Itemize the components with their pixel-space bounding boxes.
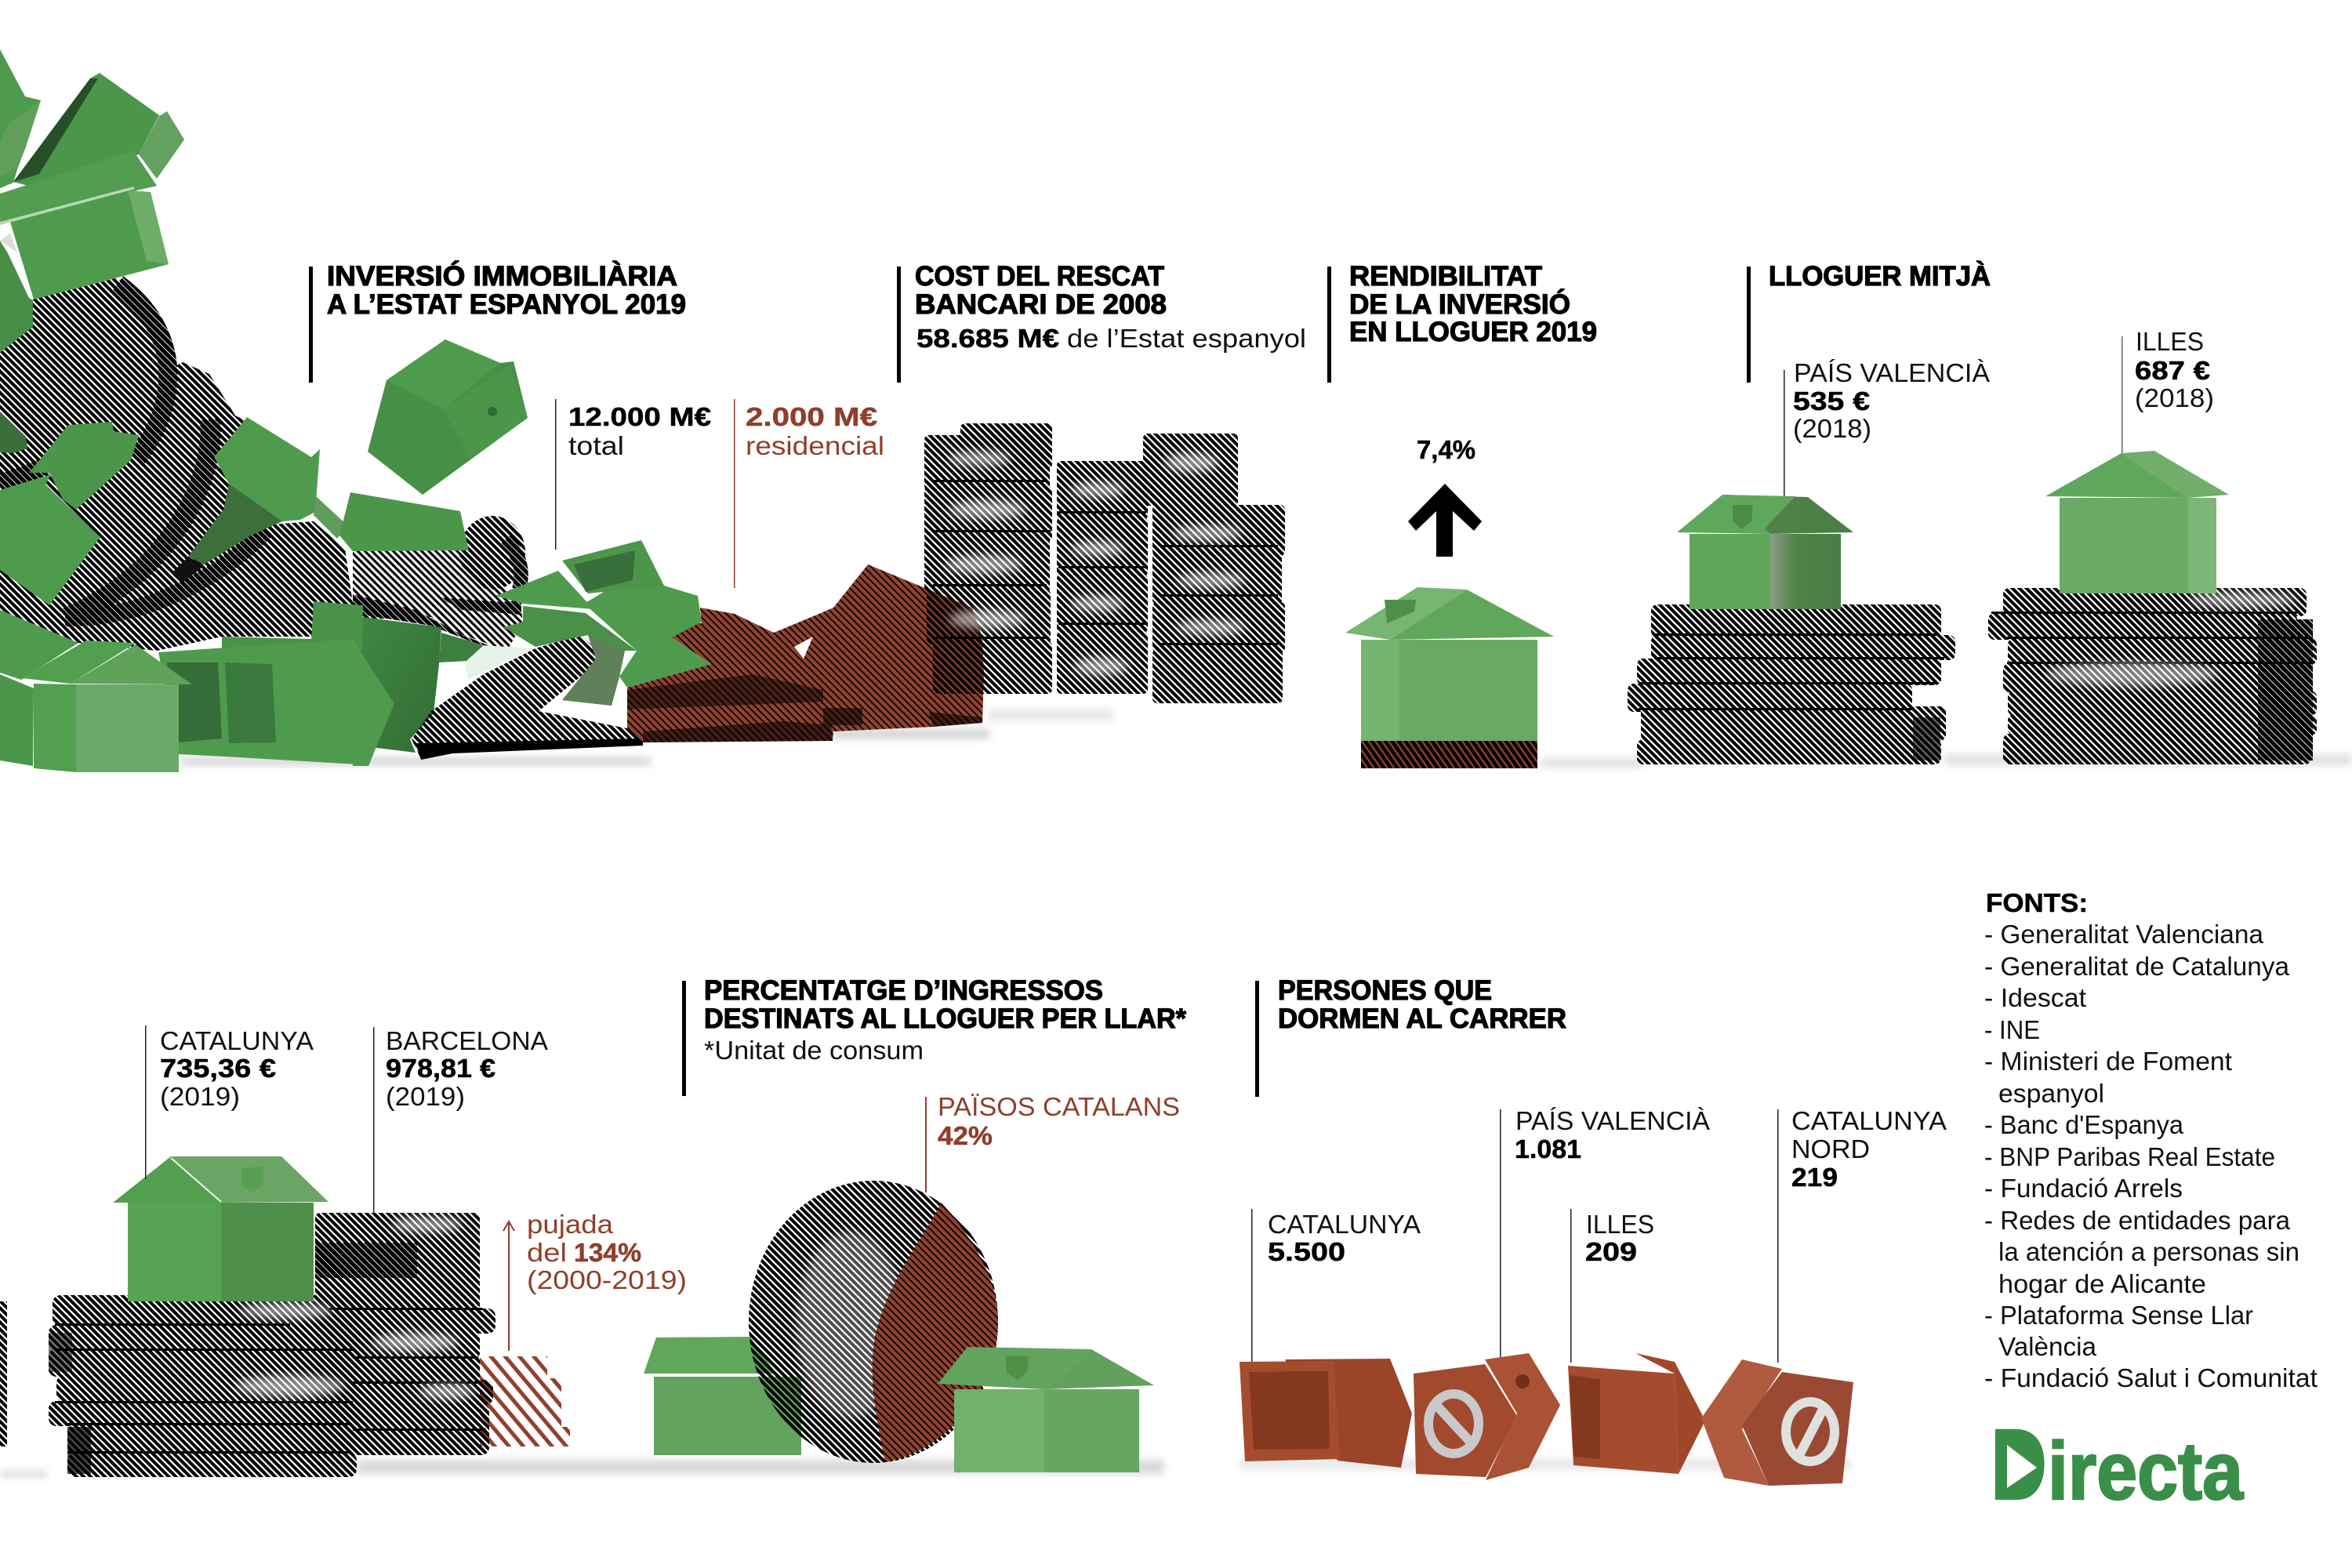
callout: 12.000 M€ total — [555, 399, 711, 550]
sources list: - Ministeri de Foment — [1984, 1047, 2232, 1076]
sources list: - INE — [1984, 1015, 2040, 1044]
brown house: tilted no entry sign — [1701, 1359, 1853, 1486]
heading: cost del rescat: 58.685 M€ — [916, 324, 1059, 353]
coin stack: Illes — [1988, 588, 2317, 764]
heading: percentatge d'ingressos: DESTINATS AL LLOGUER PER LLAR* — [704, 1004, 1186, 1034]
callout: Barcelona 978,81 €: 978,81 € — [386, 1054, 495, 1083]
icon: up arrow — [1408, 484, 1482, 557]
sources list: FONTS: — [1986, 888, 2088, 917]
brown hatch block: rent increase — [480, 1356, 570, 1446]
sources list: - BNP Paribas Real Estate — [1984, 1142, 2275, 1171]
callout: Catalunya Nord 219 — [1777, 1106, 1947, 1363]
brown house: side box — [1568, 1353, 1705, 1474]
green houses, middle pile — [0, 412, 469, 605]
sources list: espanyol — [1998, 1079, 2104, 1108]
callout: Catalunya 735,36 €: 735,36 € — [160, 1054, 276, 1083]
callout: País Valencià 535 € — [1784, 358, 1990, 496]
heading: persones que dormen al carrer — [1255, 975, 1566, 1097]
callout: Illes 687 €: ILLES — [2136, 327, 2204, 356]
ground shadows, top row — [180, 710, 2352, 767]
green houses, bottom pile — [0, 601, 392, 766]
callout: Catalunya Nord 219: NORD — [1791, 1134, 1870, 1163]
callout: Catalunya 735,36 €: (2019) — [160, 1082, 240, 1111]
heading: cost del rescat: de l’Estat espanyol — [1067, 324, 1306, 353]
callout: Catalunya 5.500 — [1251, 1209, 1421, 1362]
callout: Catalunya 5.500: CATALUNYA — [1268, 1210, 1421, 1239]
callout: Països Catalans 42%: 42% — [938, 1121, 993, 1150]
callout: Illes 209: 209 — [1585, 1237, 1637, 1266]
heading: inversió immobiliària: INVERSIÓ IMMOBILIÀRIA — [327, 260, 677, 292]
callout: Catalunya 735,36 € — [145, 1025, 314, 1179]
heading: rendibilitat: RENDIBILITAT — [1349, 261, 1542, 292]
brown house, residential — [627, 564, 984, 742]
brown house: open box — [1240, 1359, 1412, 1468]
callout: País Valencià 1.081: 1.081 — [1515, 1134, 1581, 1163]
coin towers — [924, 423, 1285, 703]
heading: percentatge d'ingressos: *Unitat de consum — [704, 1036, 924, 1065]
heading: percentatge d'ingressos — [682, 975, 1186, 1096]
sources list: València — [1998, 1332, 2097, 1361]
callout: pujada del 134%: pujada — [527, 1210, 614, 1239]
callout: Catalunya Nord 219: 219 — [1791, 1163, 1838, 1192]
coin stack: Catalunya — [49, 1295, 360, 1477]
callout: Catalunya 735,36 €: CATALUNYA — [160, 1026, 314, 1055]
callout: Barcelona 978,81 €: BARCELONA — [386, 1026, 548, 1055]
pile coins — [0, 278, 525, 651]
callout: pujada del 134%: (2000-2019) — [527, 1265, 687, 1294]
callout: Catalunya 5.500: 5.500 — [1268, 1237, 1345, 1266]
callout: País Valencià 1.081: PAÍS VALENCIÀ — [1515, 1106, 1710, 1135]
heading: persones que dormen al carrer: PERSONES QUE — [1278, 975, 1492, 1006]
heading: rendibilitat — [1327, 261, 1597, 383]
callout: Països Catalans 42% — [925, 1092, 1180, 1192]
heading: percentatge d'ingressos: PERCENTATGE D’INGRESSOS — [704, 975, 1103, 1006]
callout: Illes 209: ILLES — [1586, 1210, 1654, 1239]
heading: lloguer mitjà: LLOGUER MITJÀ — [1769, 260, 1991, 292]
green boxes behind, pile centre — [353, 617, 533, 766]
house with brown base — [1345, 587, 1554, 768]
illustration: pile of coins and houses — [0, 49, 984, 772]
house right of coin — [938, 1347, 1154, 1472]
sources list: - Generalitat de Catalunya — [1984, 952, 2290, 981]
callout: Barcelona 978,81 € — [373, 1026, 548, 1213]
callout: País Valencià 535 €: (2018) — [1793, 414, 1871, 443]
heading: rendibilitat: DE LA INVERSIÓ — [1349, 289, 1570, 320]
house: Illes — [2045, 451, 2229, 593]
callout: 2.000 M€ residencial: residencial — [746, 431, 884, 460]
callout: Catalunya Nord 219: CATALUNYA — [1791, 1106, 1947, 1135]
logo: Directa: irecta — [2048, 1426, 2244, 1517]
sources list: - Redes de entidades para — [1984, 1206, 2291, 1235]
green house bottom left — [22, 641, 192, 772]
coin in front of the pile — [412, 635, 643, 760]
logo: Directa — [1991, 1409, 2244, 1521]
heading: inversió immobiliària — [309, 260, 686, 383]
heading: lloguer mitjà — [1747, 260, 1991, 383]
callout: 2.000 M€ residencial — [734, 399, 884, 588]
heading: cost del rescat: COST DEL RESCAT — [915, 261, 1164, 292]
coin stack: Barcelona — [315, 1213, 495, 1455]
green box cluster, pile right — [495, 540, 711, 706]
sources list: - Fundació Salut i Comunitat — [1984, 1363, 2318, 1392]
house: País Valencià — [1677, 495, 1853, 609]
sources list: - Fundació Arrels — [1984, 1174, 2183, 1203]
sources list — [1984, 888, 2318, 1392]
sources list: la atención a personas sin — [1998, 1237, 2299, 1266]
ground shadows, bottom row — [0, 1460, 1851, 1477]
callout: pujada del 134% — [527, 1210, 687, 1294]
callout: pujada del 134%: del — [527, 1238, 567, 1267]
sources list: - Plataforma Sense Llar — [1984, 1301, 2253, 1330]
callout: País Valencià 535 €: 535 € — [1793, 387, 1870, 416]
callout: País Valencià 1.081 — [1500, 1106, 1710, 1357]
callout: Illes 687 €: (2018) — [2135, 383, 2214, 412]
callout: 2.000 M€ residencial: 2.000 M€ — [746, 402, 877, 431]
value: 7,4%: 7,4% — [1417, 435, 1475, 464]
sources list: - Banc d'Espanya — [1984, 1110, 2184, 1139]
callout: Barcelona 978,81 €: (2019) — [386, 1082, 465, 1111]
callout: País Valencià 535 €: PAÍS VALENCIÀ — [1794, 358, 1990, 387]
heading: rendibilitat: EN LLOGUER 2019 — [1349, 317, 1597, 347]
callout: 12.000 M€ total: 12.000 M€ — [568, 402, 711, 431]
arrow: rent increase — [503, 1221, 514, 1351]
callout: Illes 209 — [1570, 1209, 1654, 1363]
sources list: hogar de Alicante — [1998, 1269, 2206, 1298]
callout: Països Catalans 42%: PAÏSOS CATALANS — [938, 1092, 1180, 1121]
heading: persones que dormen al carrer: DORMEN AL CARRER — [1278, 1004, 1566, 1034]
callout: Illes 687 € — [2122, 327, 2214, 453]
callout: Illes 687 €: 687 € — [2135, 356, 2210, 385]
logo: Directa: D — [1991, 1409, 2047, 1521]
flying green house — [368, 339, 528, 495]
coin chart: 42% of income — [749, 1181, 998, 1463]
heading: cost del rescat: BANCARI DE 2008 — [915, 289, 1167, 320]
callout: pujada del 134%: 134% — [574, 1238, 641, 1267]
lower-left coin sliver — [0, 1301, 7, 1446]
sources list: - Idescat — [1984, 983, 2086, 1012]
heading: cost del rescat — [897, 261, 1306, 383]
house: Catalunya — [113, 1156, 328, 1301]
heading: inversió immobiliària: A L’ESTAT ESPANYOL 2019 — [327, 289, 686, 320]
house left of coin — [644, 1337, 801, 1455]
sources list: - Generalitat Valenciana — [1984, 920, 2264, 949]
callout: 12.000 M€ total: total — [568, 431, 624, 460]
green houses, upper pile — [0, 49, 184, 353]
coin stack: País Valencià — [1628, 604, 1955, 764]
brown house: no entry sign — [1414, 1353, 1560, 1480]
